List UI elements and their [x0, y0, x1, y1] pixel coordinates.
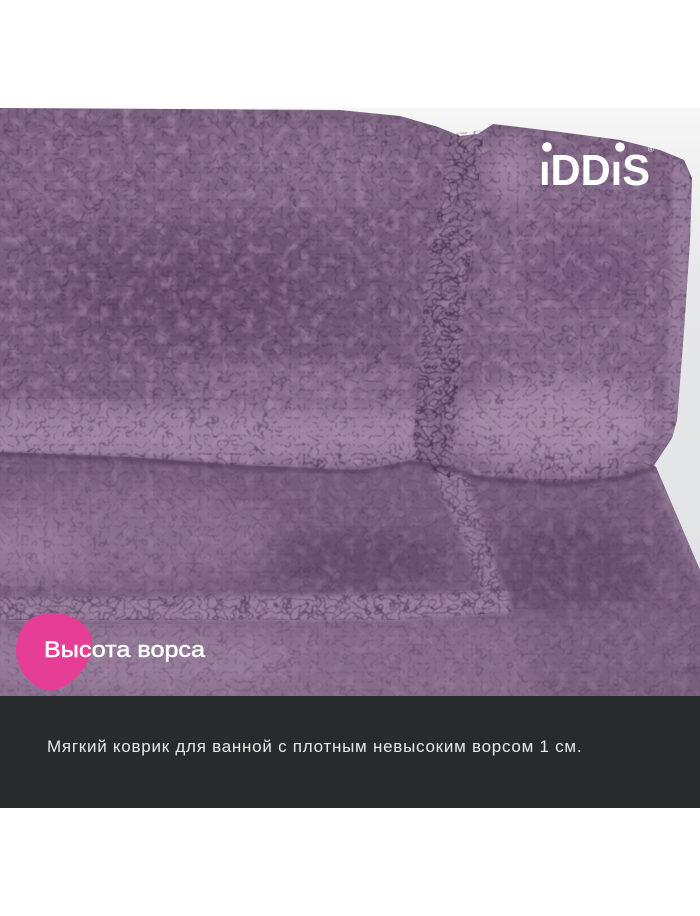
product photo: rolled purple bath mat [0, 108, 700, 696]
pile texture on mats [0, 100, 700, 696]
lower mat [0, 440, 700, 708]
description text: Мягкий коврик для ванной с плотным невысоким ворсом 1 см. [47, 737, 582, 756]
shadow between rolled and flat mat [0, 454, 653, 485]
heading: pile height: Высота ворса [44, 637, 206, 662]
mats with pile texture [0, 100, 700, 708]
right end of roll [498, 134, 662, 380]
woven vertical stripe [412, 130, 484, 478]
bound edge [664, 154, 692, 440]
lower border stripe [0, 590, 512, 620]
lower mat lighter foreground band [0, 618, 540, 708]
photo background [0, 108, 700, 696]
iDDiS logo: ® [648, 145, 654, 154]
iDDiS logo: ıDDıS [539, 146, 650, 195]
dark description panel [0, 696, 700, 808]
upper rolled mat [0, 100, 700, 500]
pink badge blob [16, 613, 92, 690]
lower lit edge of roll [0, 405, 450, 465]
